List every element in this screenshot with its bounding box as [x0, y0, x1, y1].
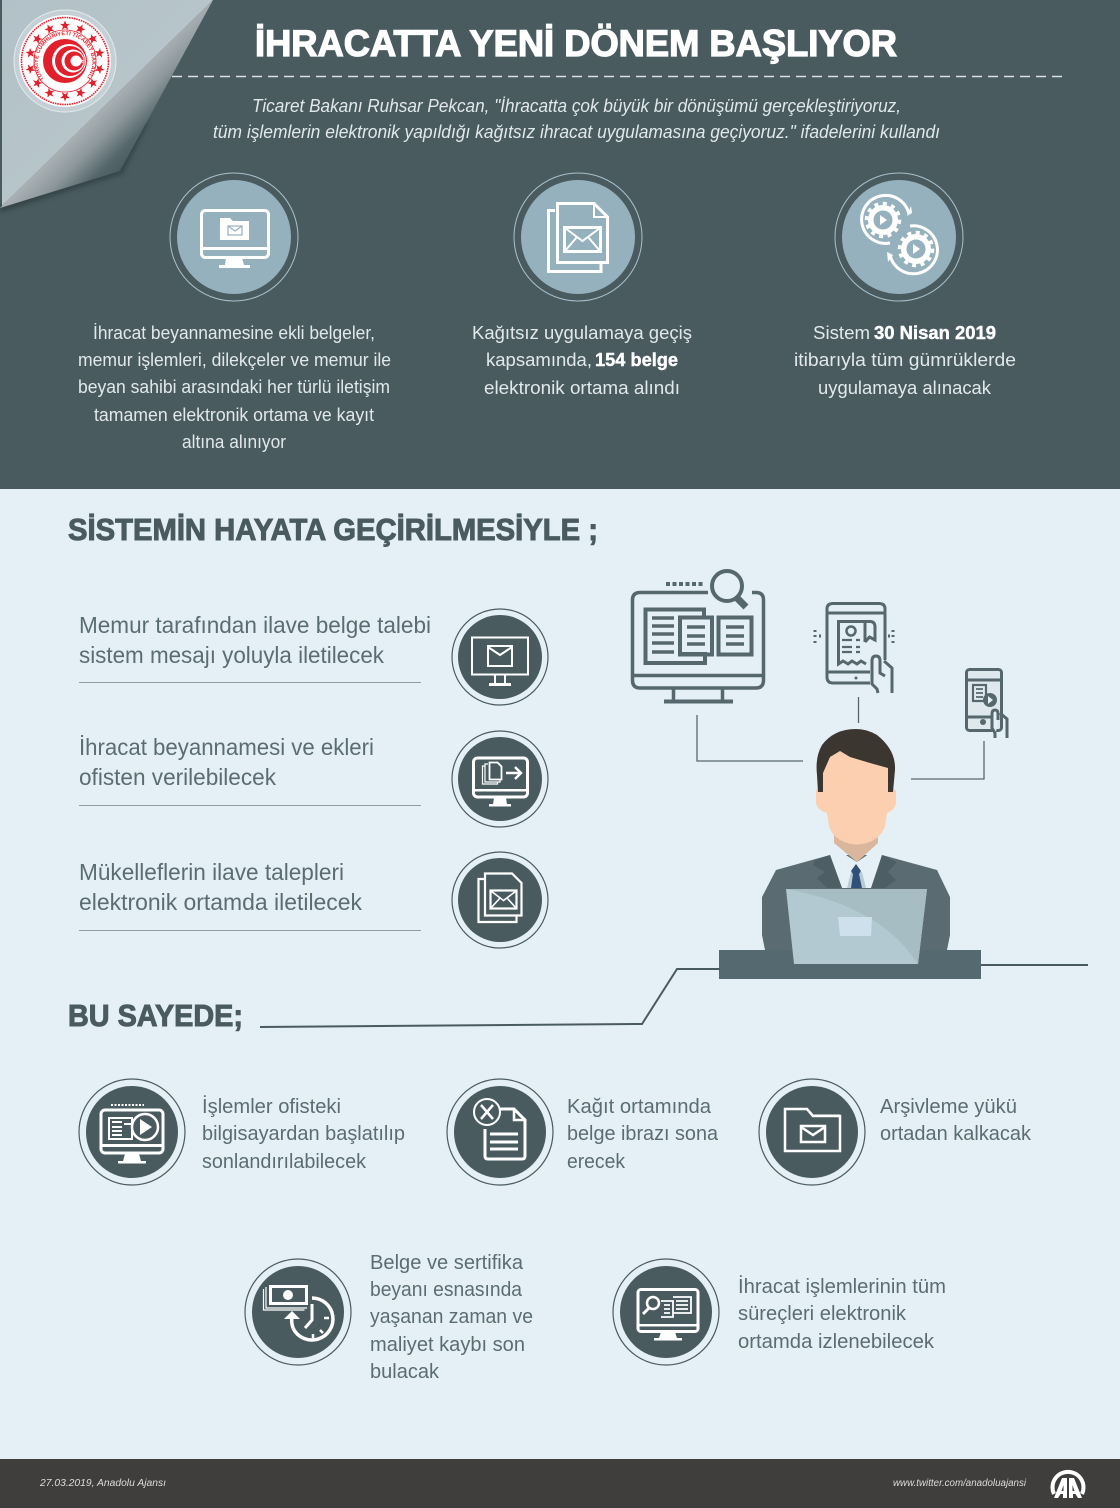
panel: footer — [0, 1459, 1120, 1508]
text block: column 1 — [78, 323, 391, 452]
text block: column 3 — [794, 323, 1016, 398]
text block: benefit 3: Arşivleme yükü — [880, 1095, 1017, 1118]
icon: phone with video — [966, 670, 1007, 738]
icon: monitor with folder — [170, 173, 298, 301]
icon: crossed document — [447, 1079, 553, 1185]
logo: ministry seal — [14, 10, 116, 112]
text block: benefit 1: İşlemler ofisteki — [202, 1095, 341, 1118]
list item 2 — [79, 734, 421, 806]
icon: documents with envelope — [452, 852, 548, 948]
icon: monitor with envelope — [452, 609, 548, 705]
icon: monitor with documents and arrow — [452, 731, 548, 827]
icon: monitor with search — [613, 1259, 719, 1365]
list item 1: Memur tarafından ilave belge talebi — [79, 612, 431, 638]
text block: column 2: 154 belge — [595, 350, 678, 370]
text block: benefit 3: ortadan kalkacak — [880, 1122, 1032, 1145]
text block: column 3: uygulamaya alınacak — [818, 378, 992, 398]
list item 2: İhracat beyannamesi ve ekleri — [79, 734, 374, 760]
laptop — [786, 889, 927, 964]
text block: benefit 1: bilgisayardan başlatılıp — [202, 1122, 405, 1145]
text block: benefit 2: erecek — [567, 1150, 626, 1173]
text block: benefit 2: Kağıt ortamında — [567, 1095, 712, 1118]
text block: benefit 4 — [370, 1251, 533, 1383]
text block: benefit 4: bulacak — [370, 1360, 440, 1383]
connector lines — [697, 697, 984, 779]
title: İHRACATTA YENİ DÖNEM BAŞLIYOR — [255, 23, 897, 64]
text block: benefit 4: Belge ve sertifika — [370, 1251, 524, 1274]
list item 2: ofisten verilebilecek — [79, 764, 276, 790]
text block: benefit 5 — [738, 1275, 946, 1353]
text block: benefit 5: ortamda izlenebilecek — [738, 1330, 935, 1353]
icon: monitor with magnifier and documents — [632, 571, 764, 702]
page curl corner — [0, 0, 213, 213]
text block: column 2: elektronik ortama alındı — [484, 378, 680, 398]
text block: column 1: altına alınıyor — [182, 432, 286, 452]
list item 3: Mükelleflerin ilave talepleri — [79, 859, 344, 885]
text block: benefit 2: belge ibrazı sona — [567, 1122, 719, 1145]
list item 3: elektronik ortamda iletilecek — [79, 889, 362, 915]
footer date: 27.03.2019, Anadolu Ajansı — [39, 1478, 166, 1489]
footer url: www.twitter.com/anadoluajansi — [893, 1478, 1027, 1489]
text block: column 2 — [472, 323, 692, 398]
text block: column 3: itibarıyla tüm gümrüklerde — [794, 350, 1016, 370]
list item 3 — [79, 859, 421, 930]
desk — [719, 950, 981, 979]
face — [816, 746, 896, 844]
text block: column 2: Kağıtsız uygulamaya geçiş — [472, 323, 692, 343]
icon: documents with envelope — [514, 173, 642, 301]
text block: column 1: İhracat beyannamesine ekli belgeler, — [93, 323, 375, 343]
text block: quote: tüm işlemlerin elektronik yapıldığı kağıtsız ihracat uygulamasına geçiyoruz." ifadelerini kullandı — [213, 122, 940, 142]
text block: column 1: beyan sahibi arasındaki her türlü iletişim — [78, 377, 390, 397]
text block: benefit 5: İhracat işlemlerinin tüm — [738, 1275, 946, 1298]
icon: money and clock — [245, 1259, 351, 1365]
text block: quote — [213, 96, 940, 142]
icon: gears — [835, 173, 963, 301]
text block: quote: Ticaret Bakanı Ruhsar Pekcan, "İhracatta çok büyük bir dönüşümü gerçekleştiriyoruz, — [252, 96, 901, 116]
panel: header — [0, 0, 1120, 489]
icon: monitor with play — [79, 1079, 185, 1185]
text block: column 3: 30 Nisan 2019 — [874, 323, 996, 343]
text block: benefit 3 — [880, 1095, 1032, 1145]
heading: system: SİSTEMİN HAYATA GEÇİRİLMESİYLE ; — [68, 512, 598, 547]
list item 1 — [79, 612, 431, 682]
icon: tablet with receipt — [815, 604, 893, 693]
text block: benefit 4: yaşanan zaman ve — [370, 1305, 533, 1328]
hair — [817, 729, 895, 792]
illustration: man with laptop — [719, 729, 981, 979]
text block: column 3: Sistem — [813, 323, 870, 343]
logo: AA — [1052, 1472, 1084, 1498]
text block: benefit 5: süreçleri elektronik — [738, 1302, 907, 1325]
icon: folder with envelope — [759, 1079, 865, 1185]
text block: benefit 1: sonlandırılabilecek — [202, 1150, 367, 1173]
heading: benefits: BU SAYEDE; — [68, 998, 243, 1033]
text block: benefit 4: maliyet kaybı son — [370, 1333, 525, 1356]
text block: benefit 1 — [202, 1095, 405, 1173]
text block: column 1: memur işlemleri, dilekçeler ve memur ile — [78, 350, 391, 370]
connector: desk lines — [260, 965, 1088, 1027]
text block: column 1: tamamen elektronik ortama ve kayıt — [94, 405, 374, 425]
text block: benefit 4: beyanı esnasında — [370, 1278, 523, 1301]
list item 1: sistem mesajı yoluyla iletilecek — [79, 642, 384, 668]
text block: column 2: kapsamında, — [486, 350, 592, 370]
text block: benefit 2 — [567, 1095, 719, 1173]
